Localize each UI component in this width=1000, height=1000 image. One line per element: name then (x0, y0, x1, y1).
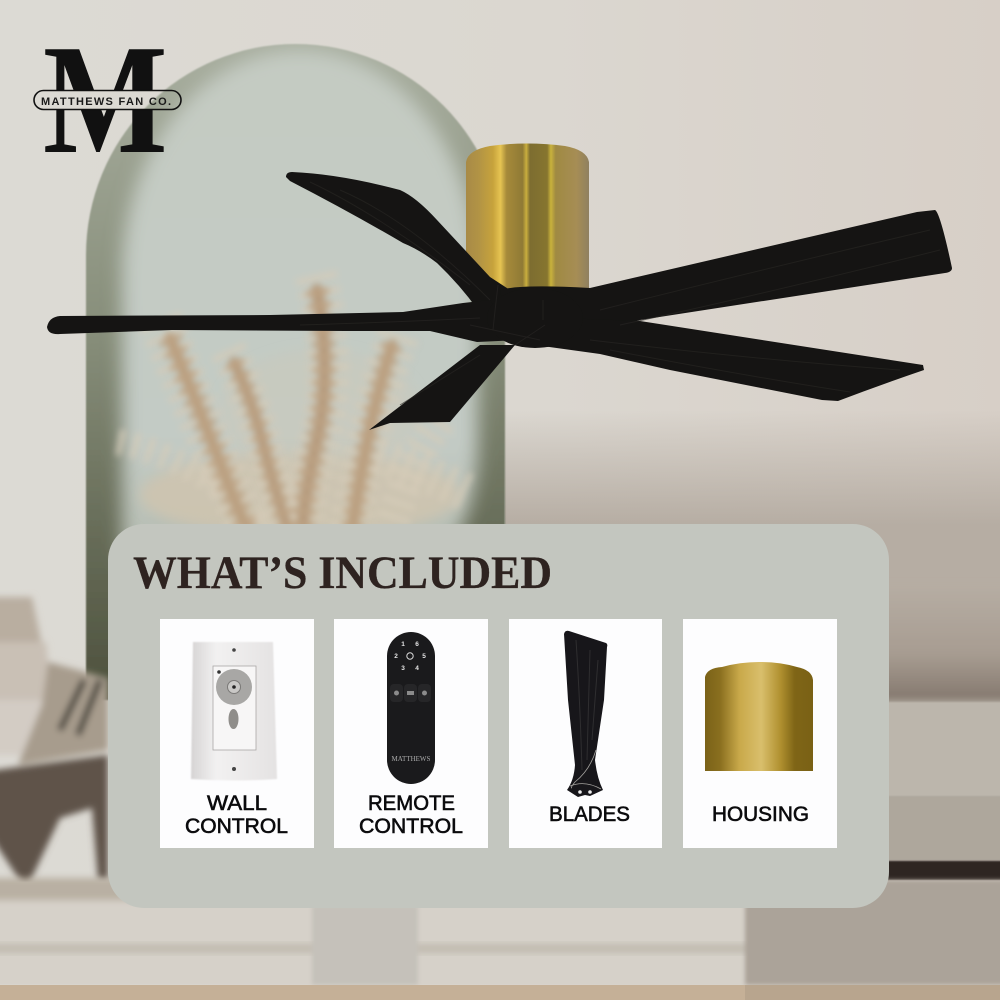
label: wall control: WALL (207, 792, 267, 815)
icon: remote: 6 (415, 641, 419, 648)
label: remote control: CONTROL (359, 815, 463, 838)
icon: remote: 2 (394, 653, 398, 660)
label: remote control: REMOTE (368, 792, 455, 815)
panel background (108, 524, 889, 908)
panel: what's included (108, 524, 889, 908)
hub (487, 288, 583, 348)
fan housing: brass cylinder (466, 144, 589, 290)
card: blades (509, 619, 662, 848)
logo monogram letter M: M (43, 13, 167, 187)
icon: remote: MATTHEWS (392, 755, 431, 763)
label: blades: BLADES (549, 803, 630, 826)
background: floor with light stripes (0, 878, 1000, 1000)
logo name pill: MATTHEWS FAN CO. (41, 96, 171, 108)
blade: lower left (369, 345, 515, 430)
icon: remote: 4 (415, 665, 419, 672)
icon: gold housing (705, 662, 813, 771)
background: arched niche (86, 44, 505, 700)
logo name pill (34, 90, 181, 110)
pampas soft base (141, 452, 456, 524)
blade: upper right (500, 210, 952, 345)
blade: long left (47, 300, 520, 342)
card: wall control (160, 619, 314, 848)
card: housing (683, 619, 837, 848)
label: remote control (359, 792, 463, 838)
ceiling fan (47, 144, 952, 430)
icon: blade (564, 631, 607, 797)
background: armchair and throw at left (0, 597, 108, 890)
icon: wall control plate (191, 642, 277, 780)
label: wall control (185, 792, 288, 838)
fan blades (47, 172, 952, 430)
heading: WHAT’S INCLUDED (133, 547, 552, 599)
label: housing: HOUSING (712, 803, 809, 826)
label: wall control: CONTROL (185, 815, 288, 838)
pampas pale feathers (118, 275, 465, 531)
icon: remote: 1 (401, 641, 405, 648)
background: blurred pampas grass (118, 275, 465, 537)
logo: Matthews Fan Co. (33, 49, 182, 152)
wood grain on blades (300, 182, 940, 405)
icon: remote: 5 (422, 653, 426, 660)
pampas tan plumes (170, 290, 392, 531)
background: sofa at right (880, 585, 1000, 880)
blade: lower right (510, 318, 924, 401)
icon: remote (387, 632, 435, 784)
icon: remote: 3 (401, 665, 405, 672)
card: remote control (334, 619, 488, 848)
blade: upper left (286, 172, 520, 330)
